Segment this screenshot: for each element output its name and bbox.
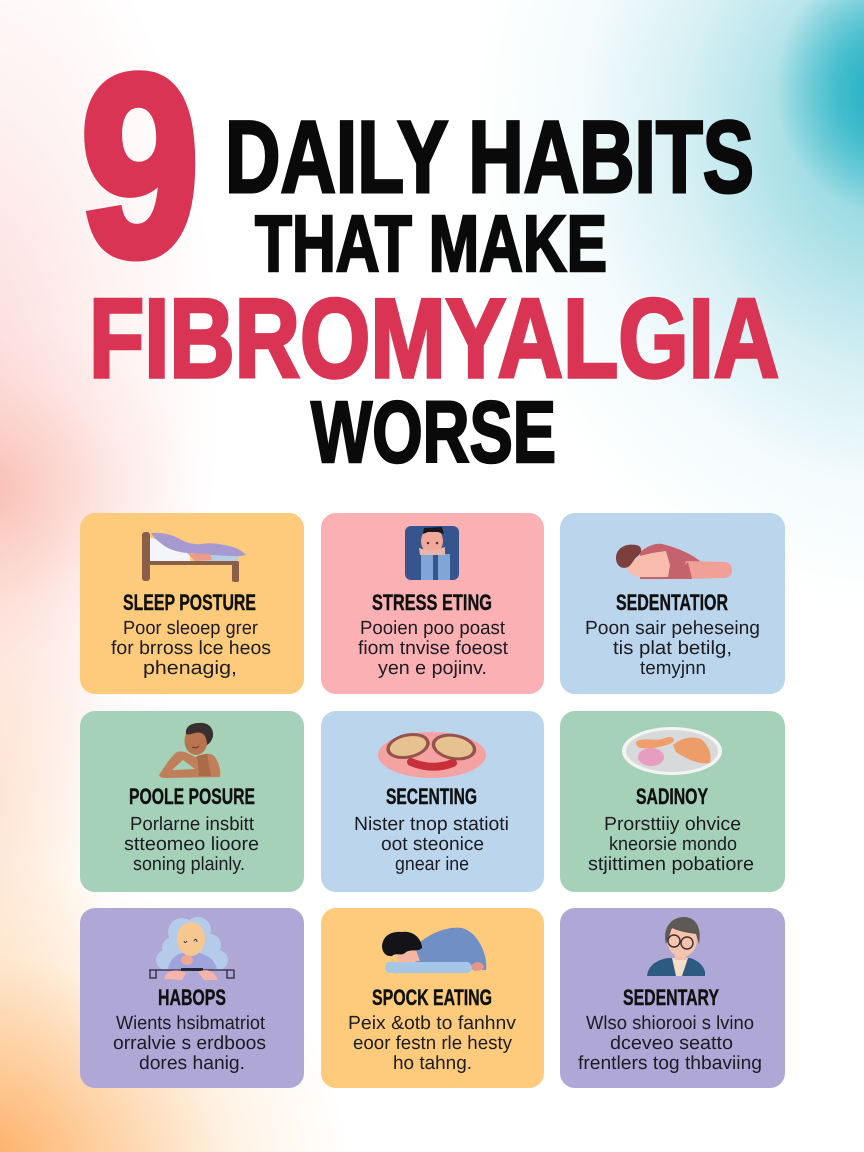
heading: SECENTING: [386, 784, 477, 809]
panel: habops: [80, 908, 304, 1088]
heading: SEDENTATIOR: [616, 590, 728, 615]
body text: Nister tnop statioti: [354, 814, 509, 835]
heading: SEDENTARY: [623, 985, 719, 1010]
heading: STRESS ETING: [372, 590, 492, 615]
body text: Wlso shiorooi s lvino: [586, 1013, 754, 1034]
body text: Poor sleoep grer: [123, 618, 259, 639]
body text: orralvie s erdboos: [113, 1033, 266, 1054]
panel: sedentatior: [560, 513, 785, 694]
body text: tis plat betilg,: [613, 638, 732, 659]
panel: poole posure: [80, 711, 304, 892]
body text: phenagig,: [143, 658, 237, 679]
body text: frentlers tog thbaviing: [578, 1053, 762, 1074]
icon: person lying face down: [616, 544, 732, 579]
body text: [348, 1013, 517, 1074]
heading: SADINOY: [636, 784, 708, 809]
body text: Porlarne insbitt: [130, 814, 255, 835]
body text: [124, 814, 259, 875]
body text: [113, 1013, 266, 1074]
big number 9: 9: [81, 23, 199, 309]
body text: Pooien poo poast: [360, 618, 506, 639]
body text: stjittimen pobatiore: [588, 854, 754, 875]
icon: plate with patties: [378, 729, 486, 778]
body text: temyjnn: [640, 658, 706, 679]
body text: Prorsttiiy ohvice: [604, 814, 741, 835]
body text: soning plainly.: [133, 854, 245, 875]
body text: for brross lce heos: [111, 638, 271, 659]
heading: POOLE POSURE: [129, 784, 255, 809]
body text: Wients hsibmatriot: [116, 1013, 266, 1034]
body text: [588, 814, 754, 875]
icon: bed with sleeper: [142, 532, 246, 582]
title: [81, 23, 779, 481]
heading: SLEEP POSTURE: [123, 590, 256, 615]
icon: man with glasses in suit: [647, 917, 705, 976]
body text: [585, 618, 760, 679]
body text: gnear ine: [395, 854, 469, 875]
body text: [578, 1013, 762, 1074]
body text: dores hanig.: [139, 1053, 245, 1074]
panel: sedentary: [560, 908, 785, 1088]
body text: kneorsie mondo: [609, 834, 737, 855]
body text: yen e pojinv.: [378, 658, 487, 679]
body text: stteomeo lioore: [124, 834, 259, 855]
title line: worse: WORSE: [311, 384, 556, 481]
body text: [354, 814, 509, 875]
heading: HABOPS: [158, 985, 226, 1010]
body text: [358, 618, 509, 679]
body text: eoor festn rle hesty: [353, 1033, 512, 1054]
icon: stressed person: [405, 526, 459, 580]
body text: dceveo seatto: [610, 1033, 733, 1054]
panel: spock eating: [321, 908, 544, 1088]
icon: person leaning on arm: [159, 723, 220, 778]
body text: ho tahng.: [393, 1053, 472, 1074]
panel: sadinoy: [560, 711, 785, 892]
body text: [111, 618, 271, 679]
panel: stress eating: [321, 513, 544, 694]
title line: that make: THAT MAKE: [255, 199, 607, 288]
body text: Peix &otb to fanhnv: [348, 1013, 517, 1034]
heading: SPOCK EATING: [372, 985, 492, 1010]
body text: oot steonice: [381, 834, 484, 855]
icon: plate of food: [622, 727, 722, 775]
icon: person resting head on pillow: [382, 928, 486, 973]
body text: fiom tnvise foeost: [358, 638, 509, 659]
icon: person with cloud hair: [149, 917, 234, 980]
panel: secenting: [321, 711, 544, 892]
panel: sleep posture: [80, 513, 304, 694]
body text: Poon sair peheseing: [585, 618, 760, 639]
